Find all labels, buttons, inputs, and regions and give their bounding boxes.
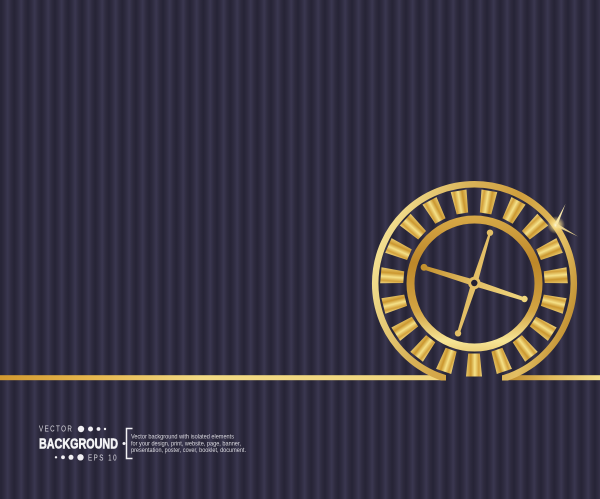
heading: background: BACKGROUND: [39, 436, 118, 452]
description text: [131, 434, 246, 454]
label: vector: VECTOR: [39, 424, 73, 434]
roulette wheel icon: [375, 184, 574, 383]
description text: presentation, poster, cover, booklet, document.: [131, 448, 246, 454]
gold horizontal line: right: [502, 375, 600, 380]
description text: Vector background with isolated elements: [131, 434, 234, 440]
bracket: [126, 428, 132, 458]
wheel tiles: [380, 189, 568, 376]
inner ring: [410, 220, 538, 348]
logo block: [39, 424, 246, 463]
wheel hub: [471, 280, 477, 286]
description text: for your design, print, website, page, banner,: [131, 442, 241, 448]
sparkle: [547, 204, 578, 236]
wheel hands: [421, 230, 528, 336]
dots: upper row: [78, 426, 106, 432]
outer ring: [375, 184, 574, 383]
bracket pointer: [122, 442, 126, 445]
dots: lower row: [55, 454, 84, 460]
label: eps 10: EPS 10: [88, 453, 118, 463]
gold horizontal line: left: [0, 375, 446, 380]
